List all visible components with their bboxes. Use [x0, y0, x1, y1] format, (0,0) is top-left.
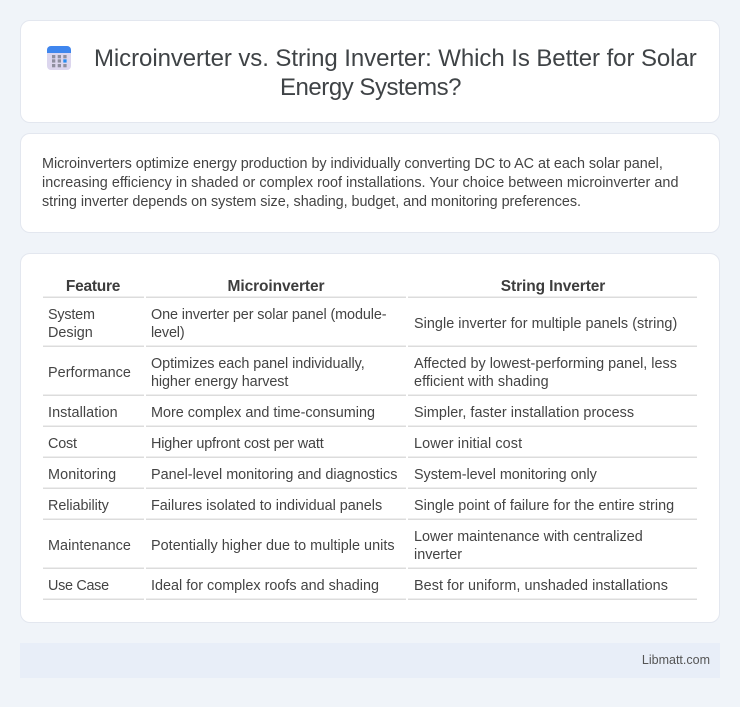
comparison table: inverter	[414, 547, 462, 563]
comparison table: One inverter per solar panel (module-	[151, 307, 386, 323]
row: Use Case: Use Case	[48, 578, 109, 594]
row: Cost: Cost	[48, 436, 77, 452]
comparison table: level)	[151, 325, 184, 341]
intro text: string inverter depends on system size, shading, budget, and monitoring preferences.	[42, 194, 581, 210]
row: System Design	[48, 307, 95, 341]
comparison table: Optimizes each panel individually,	[151, 356, 365, 372]
comparison table: System-level monitoring only	[414, 467, 597, 483]
comparison table: Single point of failure for the entire string	[414, 498, 674, 514]
title: Energy Systems?	[280, 74, 461, 101]
header card	[20, 20, 720, 123]
row: Installation: Installation	[48, 405, 118, 421]
title	[94, 45, 697, 101]
comparison table: Lower maintenance with centralized	[414, 529, 643, 545]
comparison table: More complex and time-consuming	[151, 405, 375, 421]
comparison table: Best for uniform, unshaded installations	[414, 578, 668, 594]
comparison table: Potentially higher due to multiple units	[151, 538, 395, 554]
footer credit: Libmatt.com	[642, 653, 710, 667]
row: Monitoring: Monitoring	[48, 467, 116, 483]
intro card	[20, 133, 720, 233]
column header: Microinverter: Microinverter	[228, 278, 324, 295]
intro text	[42, 156, 678, 210]
comparison table: Ideal for complex roofs and shading	[151, 578, 379, 594]
column header: String Inverter: String Inverter	[501, 278, 605, 295]
icon: calendar grid	[47, 46, 71, 70]
comparison table: efficient with shading	[414, 374, 549, 390]
row: Maintenance: Maintenance	[48, 538, 131, 554]
title: Microinverter vs. String Inverter: Which Is Better for Solar	[94, 45, 697, 72]
comparison table: Panel-level monitoring and diagnostics	[151, 467, 397, 483]
row: System Design: Design	[48, 325, 93, 341]
comparison table: Failures isolated to individual panels	[151, 498, 382, 514]
intro text: increasing efficiency in shaded or complex roof installations. Your choice between microinverter and	[42, 175, 678, 191]
row: System Design: System	[48, 307, 95, 323]
comparison table: Higher upfront cost per watt	[151, 436, 324, 452]
comparison table: Single inverter for multiple panels (string)	[414, 316, 677, 332]
comparison table: Lower initial cost	[414, 436, 522, 452]
row: Reliability: Reliability	[48, 498, 109, 514]
row: Performance: Performance	[48, 365, 131, 381]
column header: Feature: Feature	[66, 278, 120, 295]
comparison table: higher energy harvest	[151, 374, 288, 390]
table card	[20, 253, 720, 623]
footer bar	[20, 643, 720, 678]
intro text: Microinverters optimize energy production by individually converting DC to AC at each solar panel,	[42, 156, 663, 172]
comparison table: Affected by lowest-performing panel, less	[414, 356, 677, 372]
comparison table: Simpler, faster installation process	[414, 405, 634, 421]
